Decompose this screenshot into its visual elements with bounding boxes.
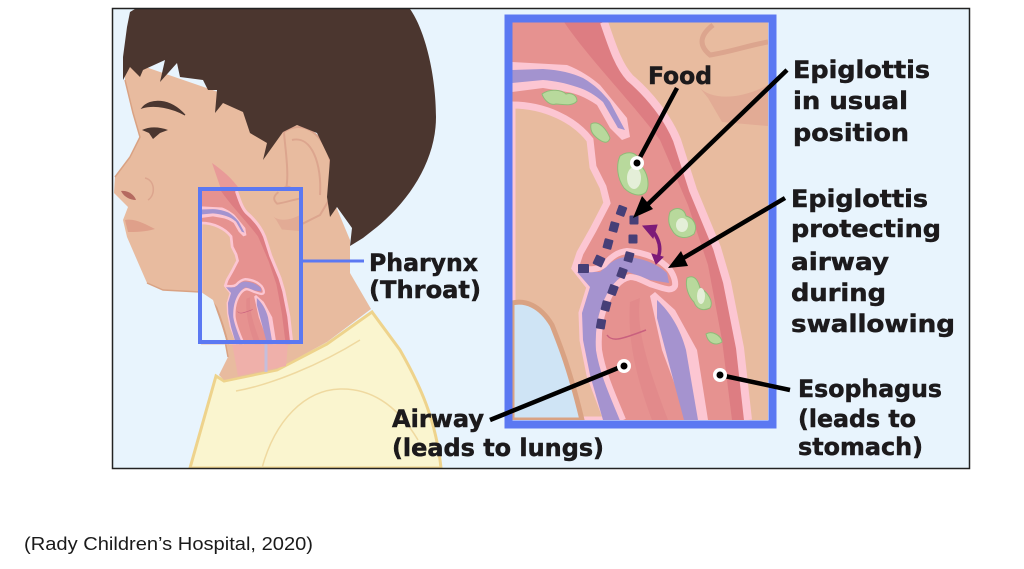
boy's head and neck [114,60,371,380]
source caption: (Rady Children’s Hospital, 2020) [24,534,313,554]
inset: epiglottis close-up [508,18,772,424]
lips [125,220,155,232]
illustration frame [113,9,970,468]
label: esophagus: (leads to [798,405,916,433]
food pointer [630,88,677,170]
label: epiglottis in usual position: Epiglottis [793,56,930,84]
label: pharynx [370,252,480,302]
arrow: epiglottis protecting airway [668,198,785,268]
eyebrow [142,101,185,115]
label: pharynx: Pharynx [369,249,479,277]
pharynx small view [200,163,364,376]
arrow: epiglottis in usual position [633,70,787,218]
label: epiglottis in usual position: in usual [793,87,908,115]
food pieces [542,90,722,344]
label: epiglottis protecting airway during swallowing: airway [791,248,889,276]
airway pointer [490,359,631,420]
boy's hair [123,9,436,246]
label: epiglottis protecting airway during swallowing: swallowing [791,310,955,338]
label: esophagus: Esophagus [798,375,942,403]
label: pharynx: (Throat) [369,276,481,304]
label: epiglottis protecting airway during swallowing [791,185,955,338]
eye [142,127,168,139]
food highlights [627,167,705,304]
label: epiglottis protecting airway during swallowing: Epiglottis [791,185,928,213]
label: esophagus: stomach) [798,433,923,461]
label: epiglottis protecting airway during swallowing: protecting [791,215,941,243]
pointer arrows [490,70,790,420]
label: epiglottis in usual position: position [793,119,909,147]
ear [283,126,330,224]
boy's shirt [190,312,441,468]
label: airway [392,405,604,462]
label: airway: (leads to lungs) [392,434,604,462]
label: airway: Airway [392,405,484,433]
nose [121,178,153,200]
label: food: Food [648,62,712,90]
epiglottis dashed position [578,205,638,330]
label: epiglottis protecting airway during swallowing: during [791,279,886,307]
esophagus pointer [713,368,790,390]
label: epiglottis in usual position [793,56,930,147]
label: esophagus [798,375,942,461]
purple movement arrow [643,225,663,264]
